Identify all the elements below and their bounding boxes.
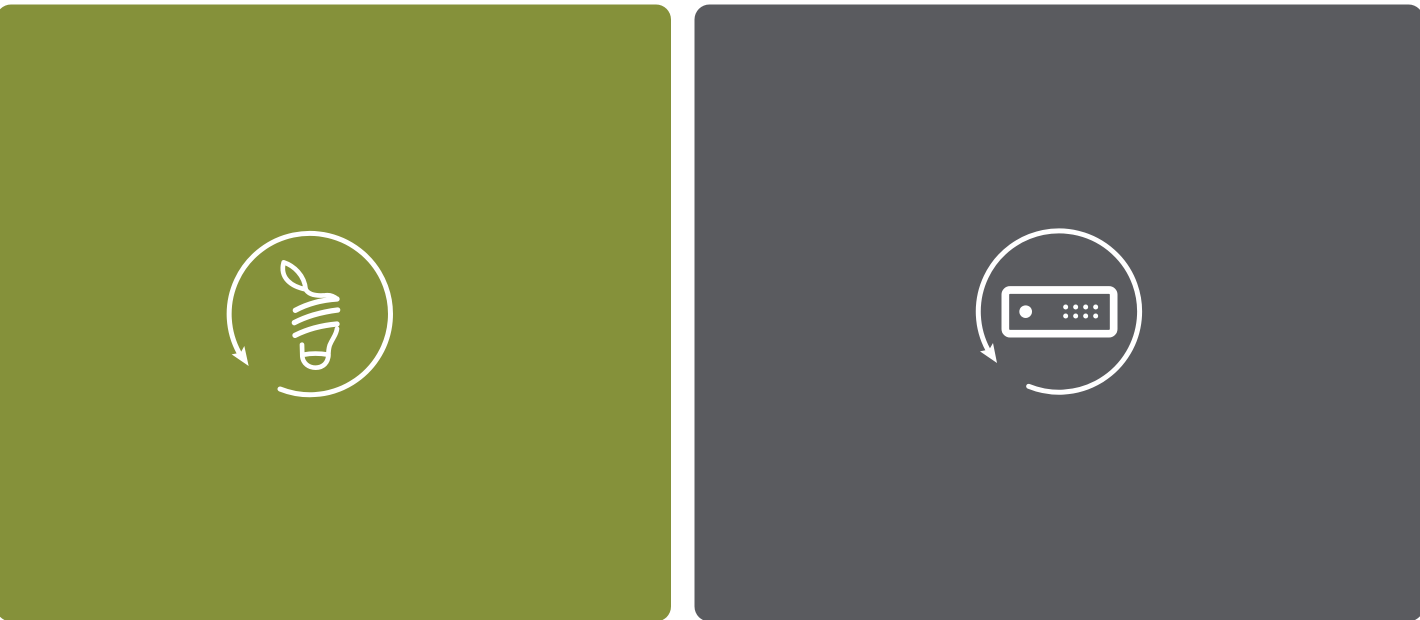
device — [1005, 290, 1114, 334]
leaf — [283, 262, 306, 289]
bulb neck — [328, 329, 337, 357]
bulb with leaf — [283, 262, 338, 368]
stem into coil — [306, 289, 337, 299]
icon: energy-saving bulb in circular arrow — [229, 233, 390, 395]
arrowhead — [980, 343, 997, 363]
panel background: grey — [694, 4, 1420, 620]
panel: green recycling lamp — [0, 4, 671, 620]
coil band 2 — [294, 310, 338, 323]
power light — [1019, 305, 1032, 318]
icon: device in circular arrow — [978, 231, 1140, 392]
circular arrow arc — [229, 233, 390, 395]
coil band 3 — [295, 324, 337, 335]
arrowhead — [232, 346, 249, 366]
panel background: olive — [0, 4, 671, 620]
panel: grey recycling electronics — [694, 4, 1420, 620]
bulb base — [302, 345, 328, 368]
coil band 1 — [295, 299, 337, 310]
device body — [1005, 290, 1114, 334]
indicator dots — [1063, 304, 1098, 318]
circular arrow arc — [978, 231, 1140, 392]
